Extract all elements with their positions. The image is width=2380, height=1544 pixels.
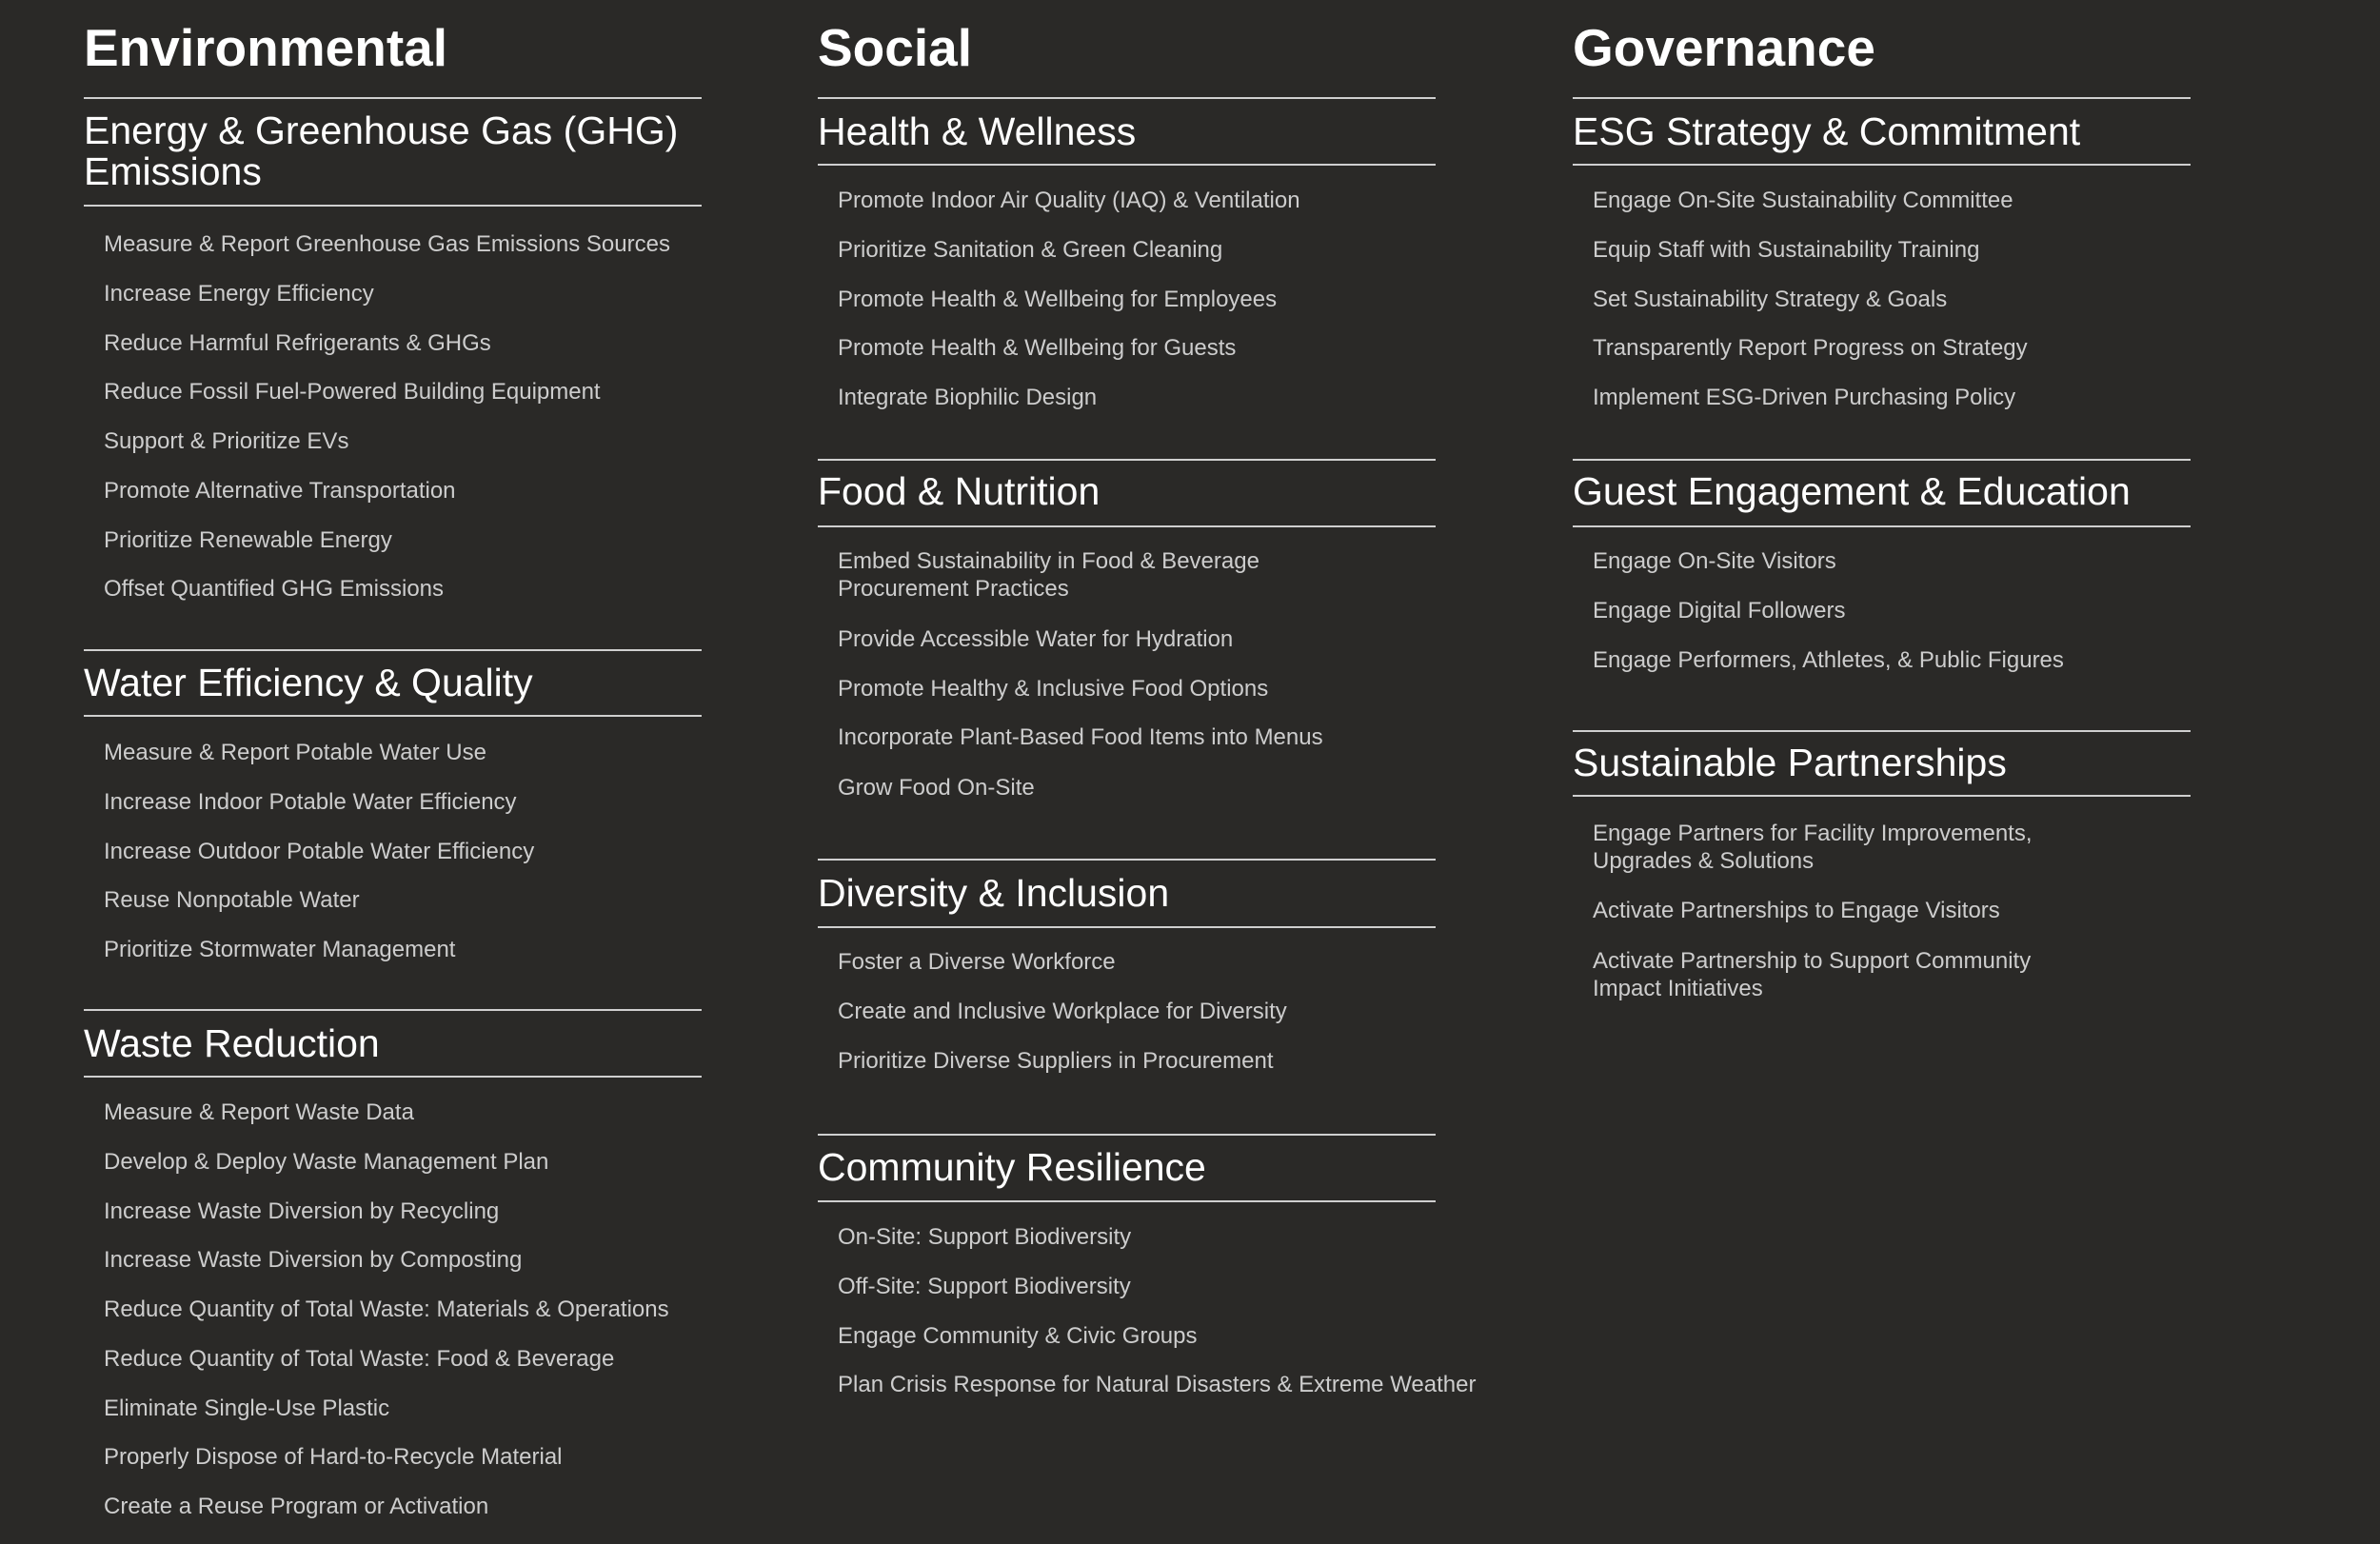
item: Impact Initiatives	[1593, 976, 1763, 1001]
heading: Food: Food & Nutrition	[818, 469, 1100, 513]
item: Embed Sustainability in Food & Beverage	[838, 548, 1259, 574]
item: Prioritize Stormwater Management	[104, 937, 455, 962]
item	[1593, 948, 2032, 1001]
item: Engage Digital Followers	[1593, 598, 1845, 624]
item: Eliminate Single-Use Plastic	[104, 1396, 389, 1421]
item: Increase Indoor Potable Water Efficiency	[104, 789, 517, 815]
item: Increase Waste Diversion by Composting	[104, 1247, 522, 1273]
section: ESG Strategy & Commitment	[1573, 97, 2191, 410]
section: Diversity & Inclusion	[818, 859, 1436, 1074]
column: Environmental	[84, 18, 702, 1519]
item: Set Sustainability Strategy & Goals	[1593, 287, 1947, 312]
item: Promote Healthy & Inclusive Food Options	[838, 676, 1268, 702]
item: Promote Indoor Air Quality (IAQ) & Ventilation	[838, 188, 1300, 213]
heading: Community: Community Resilience	[818, 1145, 1206, 1189]
item: Procurement Practices	[838, 576, 1069, 602]
item: Reduce Quantity of Total Waste: Materials & Operations	[104, 1297, 669, 1322]
item: Create and Inclusive Workplace for Diversity	[838, 999, 1287, 1024]
item: Incorporate Plant-Based Food Items into Menus	[838, 724, 1323, 750]
heading: Diversity: Diversity & Inclusion	[818, 871, 1169, 915]
item: Offset Quantified GHG Emissions	[104, 576, 444, 602]
item: Transparently Report Progress on Strategy	[1593, 335, 2028, 361]
item: Develop & Deploy Waste Management Plan	[104, 1149, 548, 1175]
item: Activate Partnerships to Engage Visitors	[1593, 898, 2000, 923]
heading: Energy & GHG	[84, 109, 678, 193]
item: Reuse Nonpotable Water	[104, 887, 360, 913]
item: Engage Partners for Facility Improvements,	[1593, 821, 2033, 846]
item: Engage On-Site Sustainability Committee	[1593, 188, 2013, 213]
item: Implement ESG-Driven Purchasing Policy	[1593, 385, 2015, 410]
heading: Partnerships: Sustainable Partnerships	[1573, 741, 2007, 784]
heading: ESG: ESG Strategy & Commitment	[1573, 109, 2080, 153]
section: Energy & GHG Emissions	[84, 97, 702, 602]
item: Measure & Report Waste Data	[104, 1099, 414, 1125]
item	[838, 548, 1259, 602]
item	[1593, 821, 2033, 874]
item: Promote Health & Wellbeing for Guests	[838, 335, 1236, 361]
item: Increase Energy Efficiency	[104, 281, 374, 307]
heading: Water: Water Efficiency & Quality	[84, 661, 533, 704]
item: Increase Outdoor Potable Water Efficiency	[104, 839, 534, 864]
item: Measure & Report Greenhouse Gas Emissions Sources	[104, 231, 670, 257]
item: Off-Site: Support Biodiversity	[838, 1274, 1131, 1299]
column: Governance	[1573, 18, 2191, 1001]
item: Integrate Biophilic Design	[838, 385, 1097, 410]
section: Guest Engagement & Education	[1573, 459, 2191, 673]
title: Governance: Governance	[1573, 18, 1875, 77]
item: Grow Food On-Site	[838, 775, 1035, 801]
heading: Health: Health & Wellness	[818, 109, 1136, 153]
heading: Energy & GHG: Emissions	[84, 149, 262, 193]
item: Promote Alternative Transportation	[104, 478, 456, 504]
item: Measure & Report Potable Water Use	[104, 740, 486, 765]
item: Reduce Fossil Fuel-Powered Building Equipment	[104, 379, 601, 405]
item: Activate Partnership to Support Community	[1593, 948, 2031, 974]
column: Social	[818, 18, 1476, 1397]
heading: Guest Engagement: Guest Engagement & Education	[1573, 469, 2131, 513]
item: Reduce Harmful Refrigerants & GHGs	[104, 330, 491, 356]
item: Equip Staff with Sustainability Training	[1593, 237, 1979, 263]
item: Foster a Diverse Workforce	[838, 949, 1116, 975]
item: Properly Dispose of Hard-to-Recycle Material	[104, 1444, 562, 1470]
item: Engage Community & Civic Groups	[838, 1323, 1197, 1349]
item: Plan Crisis Response for Natural Disasters & Extreme Weather	[838, 1372, 1476, 1397]
item: Create a Reuse Program or Activation	[104, 1494, 488, 1519]
item: Support & Prioritize EVs	[104, 428, 348, 454]
item: Engage Performers, Athletes, & Public Figures	[1593, 647, 2064, 673]
heading: Energy & GHG: Energy & Greenhouse Gas (GHG)	[84, 109, 678, 152]
item: Provide Accessible Water for Hydration	[838, 626, 1233, 652]
item: Reduce Quantity of Total Waste: Food & Beverage	[104, 1346, 614, 1372]
section: Waste Reduction	[84, 1009, 702, 1519]
section: Food & Nutrition	[818, 459, 1436, 801]
item: Prioritize Renewable Energy	[104, 527, 392, 553]
item: Upgrades & Solutions	[1593, 848, 1814, 874]
item: Prioritize Diverse Suppliers in Procurement	[838, 1048, 1274, 1074]
item: On-Site: Support Biodiversity	[838, 1224, 1131, 1250]
title: Social: Social	[818, 18, 972, 77]
item: Prioritize Sanitation & Green Cleaning	[838, 237, 1222, 263]
heading: Waste: Waste Reduction	[84, 1021, 380, 1065]
title: Environmental: Environmental	[84, 18, 447, 77]
item: Increase Waste Diversion by Recycling	[104, 1198, 499, 1224]
section: Sustainable Partnerships	[1573, 730, 2191, 1001]
item: Engage On-Site Visitors	[1593, 548, 1836, 574]
section: Community Resilience	[818, 1134, 1476, 1397]
section: Water Efficiency & Quality	[84, 649, 702, 962]
item: Promote Health & Wellbeing for Employees	[838, 287, 1277, 312]
section: Health & Wellness	[818, 97, 1436, 410]
